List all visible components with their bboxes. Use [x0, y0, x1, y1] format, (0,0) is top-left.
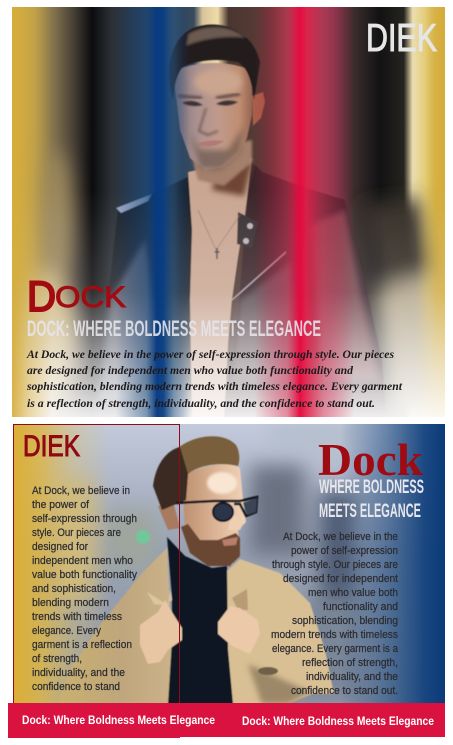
mouth: [195, 140, 224, 146]
turtleneck: [167, 537, 233, 704]
text block: left description: the power of: [32, 499, 90, 511]
forehead highlight: [194, 69, 242, 95]
right gold edge: [417, 7, 445, 392]
text block: left description: independent men who: [32, 555, 133, 567]
model figure: [96, 24, 386, 417]
lips: [222, 537, 238, 546]
white fade at bottom: [12, 214, 445, 417]
jacket right: [222, 160, 386, 417]
text block: left description: individuality, and the: [32, 667, 125, 679]
text block: left description: and sophistication,: [32, 583, 116, 595]
neck: [190, 140, 252, 186]
text block: left description: trends with timeless: [32, 611, 122, 623]
blurred street background: [13, 424, 445, 704]
background colour stripes: [12, 7, 445, 417]
text block: top description: is a reflection of strength, individuality, and the confidence to stand out.: [27, 398, 375, 410]
text block: left description: garment is a reflection: [32, 639, 132, 651]
coat inner lapel left: [147, 590, 172, 606]
coat inner lapel right: [232, 589, 248, 610]
banner text left: Dock: Where Boldness Meets Elegance: [22, 715, 215, 727]
logo: dark red bottom left: DIEK: [23, 430, 80, 463]
overlay frame on left half: [14, 424, 180, 704]
text block: left description: confidence to stand: [32, 681, 120, 693]
jacket left: [110, 177, 192, 402]
left gold edge: [12, 7, 52, 417]
gold and navy side gradients: [14, 425, 104, 703]
green street light: [136, 530, 150, 544]
text block: right description: reflection of strength,: [302, 657, 398, 669]
blurred crowd background: [15, 150, 445, 417]
heading: where boldness meets elegance: [319, 477, 424, 522]
banner: red strip with taglines: [8, 703, 445, 738]
text block: top description: are designed for independent men who value both functionality and: [27, 365, 353, 377]
text block: left description: elegance. Every: [32, 625, 101, 637]
coat left: [58, 548, 172, 704]
forehead highlight: [207, 472, 237, 494]
eyes: [182, 100, 238, 106]
hair light tips: [186, 27, 246, 46]
logo: Dock wordmark red: OCK: [55, 281, 126, 314]
jacket shoulder highlight: [116, 194, 152, 213]
jacket zip: [232, 252, 286, 300]
hair: [176, 436, 239, 505]
stubble: [190, 126, 244, 170]
panel: bottom photo with bearded model: [13, 424, 445, 704]
text block: right description: functionality and: [323, 601, 398, 613]
glasses: [176, 497, 257, 521]
banner text right: Dock: Where Boldness Meets Elegance: [242, 716, 434, 728]
head: [173, 63, 252, 170]
title: Dock serif red: Dock: [318, 434, 423, 485]
text block: left description: At Dock, we believe in: [32, 485, 130, 497]
text block: right description: [271, 531, 399, 697]
text block: left description: self-expression through: [32, 513, 137, 525]
text block: left description: blending modern: [32, 597, 109, 609]
text block: right description: individuality, and the: [306, 671, 398, 683]
model figure: [58, 436, 334, 704]
ear: [158, 505, 180, 530]
text block: right description: At Dock, we believe in the: [283, 531, 398, 543]
text block: top description: [26, 349, 403, 410]
text block: left description: of strength,: [32, 653, 82, 665]
text block: right description: power of self-expression: [291, 545, 398, 557]
text block: right description: elegance. Every garment is a: [272, 643, 399, 655]
panel: top hero with male model: [12, 7, 445, 417]
cuff button detail: [258, 667, 278, 675]
text block: left description: style. Our pieces are: [32, 527, 121, 539]
ear: [252, 92, 265, 126]
text block: right description: through style. Our pieces are: [272, 559, 398, 571]
coat sleeve shadow: [248, 664, 310, 704]
right hand: [218, 606, 260, 654]
hair dark side: [153, 447, 188, 510]
text block: top description: sophistication, blending modern trends with timeless elegance. Every garment: [26, 381, 403, 393]
logo: Dock wordmark red: D: [27, 273, 56, 321]
text block: right description: designed for independent: [283, 573, 398, 585]
text block: right description: confidence to stand out.: [291, 685, 398, 697]
beard: [181, 524, 240, 566]
text block: left description: designed for: [32, 541, 88, 553]
lapel with snaps: [237, 212, 258, 248]
left hand: [140, 600, 182, 664]
hair: [169, 24, 260, 100]
text block: right description: modern trends with timeless: [271, 629, 398, 641]
necklace: [198, 210, 240, 250]
neck shadow: [212, 160, 253, 196]
text block: top description: At Dock, we believe in the power of self-expression through style. Our pieces: [26, 349, 395, 361]
logo: Dock wordmark red: [27, 273, 126, 321]
text block: right description: sophistication, blending: [292, 615, 398, 627]
blue and red vertical stripes: [118, 7, 352, 417]
text block: left description: value both functionality: [32, 569, 137, 581]
coat right: [226, 559, 334, 704]
nose shadow: [199, 108, 218, 135]
nose: [228, 512, 243, 530]
text block: right description: men who value both: [308, 587, 398, 599]
text block: left description: [32, 485, 137, 693]
chest: [188, 158, 252, 417]
face: [182, 464, 246, 565]
